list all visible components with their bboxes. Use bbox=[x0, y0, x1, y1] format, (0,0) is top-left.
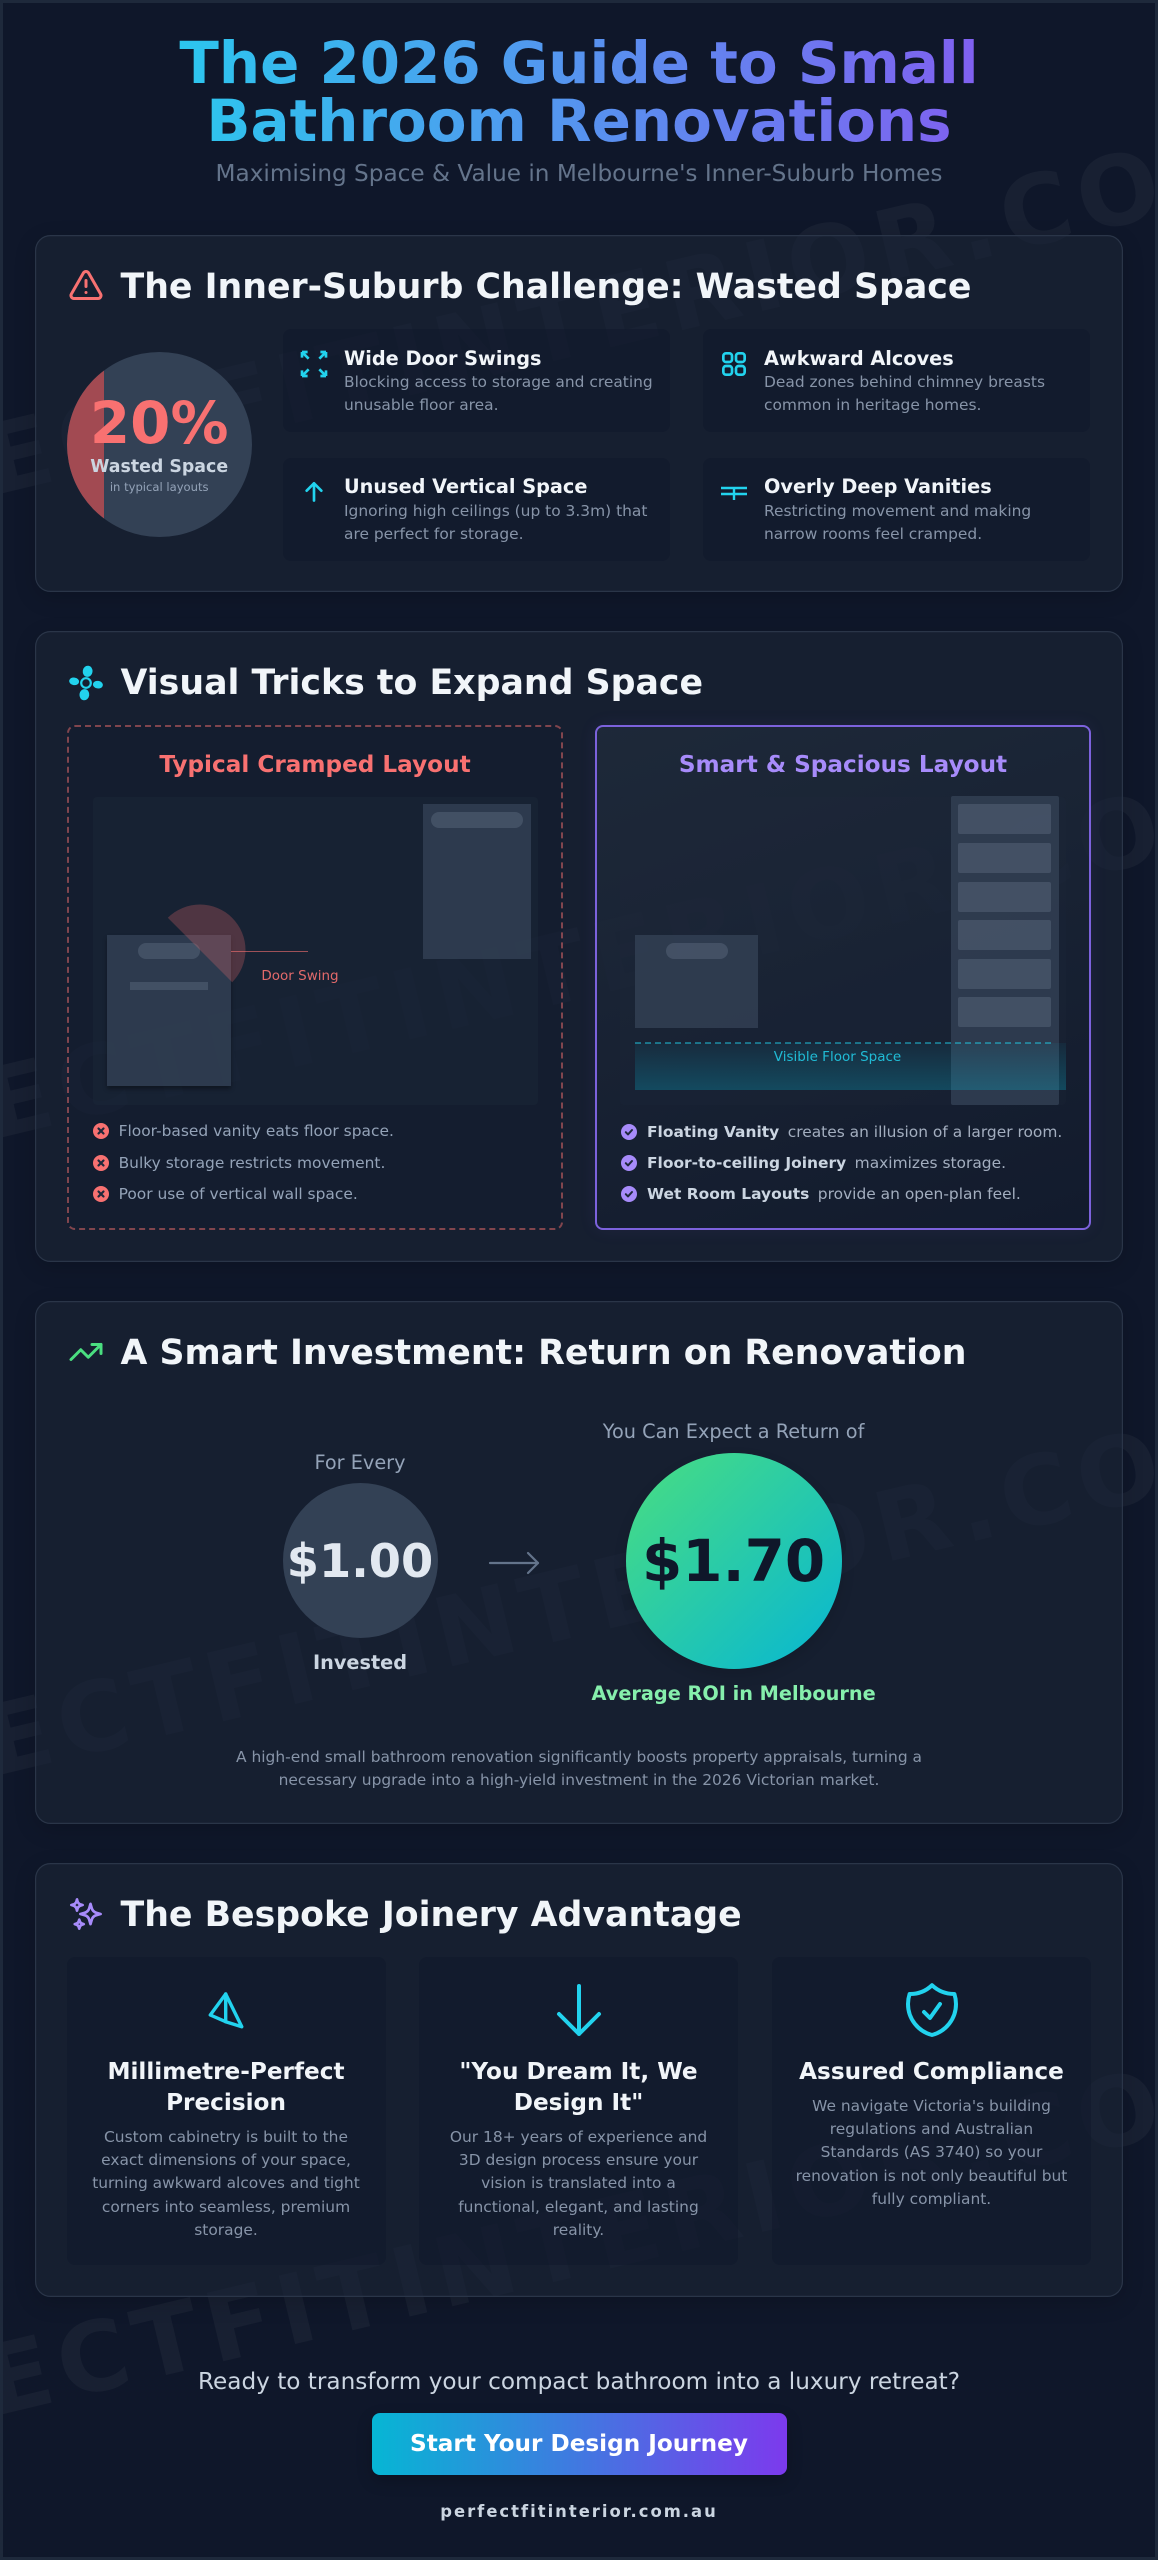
basin bbox=[666, 943, 728, 958]
drawer bar bbox=[130, 982, 208, 990]
item: wide door swings: Blocking access to storage and creating bbox=[344, 373, 653, 391]
feature: you dream it, we design it: Design It" bbox=[514, 2090, 643, 2116]
stat circle: 20% wasted space: 20% bbox=[90, 389, 228, 457]
item: awkward alcoves bbox=[703, 329, 1090, 432]
door swing line bbox=[231, 951, 308, 952]
label: for every: For Every bbox=[314, 1451, 406, 1474]
icon: down arrow bbox=[556, 1984, 602, 2036]
feature: assured compliance: renovation is not only beautiful but bbox=[796, 2167, 1067, 2185]
description: necessary upgrade into a high-yield investment in the 2026 Victorian market. bbox=[279, 1771, 879, 1789]
item: unused vertical space bbox=[283, 458, 670, 560]
panel: visual tricks bbox=[35, 631, 1123, 1262]
arrow bbox=[489, 1552, 540, 1574]
panel heading: Smart & Spacious Layout bbox=[679, 752, 1007, 778]
problem 3: Poor use of vertical wall space. bbox=[119, 1185, 358, 1203]
title: The 2026 Guide to Small bbox=[179, 29, 979, 97]
item: awkward alcoves: Dead zones behind chimney breasts bbox=[764, 373, 1045, 391]
item: wide door swings: Wide Door Swings bbox=[344, 346, 542, 370]
benefit 3: Wet Room Layouts provide an open-plan feel. bbox=[647, 1185, 1021, 1203]
feature: assured compliance: fully compliant. bbox=[872, 2190, 991, 2208]
cta question: Ready to transform your compact bathroom into a luxury retreat? bbox=[198, 2369, 960, 2395]
label: expect a return: You Can Expect a Return of bbox=[603, 1420, 864, 1443]
footer call to action bbox=[198, 2369, 960, 2521]
icon: precision bbox=[208, 1992, 244, 2028]
circle: $1.00 invested: $1.00 bbox=[287, 1534, 433, 1588]
problem 2: Bulky storage restricts movement. bbox=[119, 1154, 385, 1172]
title bbox=[179, 34, 979, 150]
feature: millimetre-perfect precision: storage. bbox=[194, 2221, 258, 2239]
item: overly deep vanities: Overly Deep Vanities bbox=[764, 475, 992, 498]
icon: deep vanity lines bbox=[721, 486, 747, 500]
panel: typical cramped layout bbox=[67, 725, 563, 1230]
door swing arc bbox=[168, 904, 246, 982]
item: overly deep vanities: narrow rooms feel cramped. bbox=[764, 525, 982, 543]
heading: The Inner-Suburb Challenge: Wasted Space bbox=[120, 267, 971, 307]
feature: millimetre-perfect precision: Precision bbox=[166, 2090, 286, 2116]
item: awkward alcoves: common in heritage homes. bbox=[764, 396, 981, 414]
icon: sparkles bbox=[70, 1898, 102, 1930]
feature: you dream it, we design it: 3D design process ensure your bbox=[459, 2151, 698, 2169]
feature: you dream it, we design it: Our 18+ years of experience and bbox=[450, 2128, 707, 2146]
icon: fan bbox=[69, 666, 103, 700]
heading: A Smart Investment: Return on Renovation bbox=[120, 1333, 966, 1373]
heading: Visual Tricks to Expand Space bbox=[120, 663, 703, 703]
feature: assured compliance: Standards (AS 3740) so your bbox=[821, 2143, 1042, 2161]
item: unused vertical space: Ignoring high ceilings (up to 3.3m) that bbox=[344, 502, 647, 520]
cta button bbox=[372, 2413, 786, 2475]
feature: millimetre-perfect precision bbox=[66, 1957, 386, 2265]
item: unused vertical space: Unused Vertical Space bbox=[344, 475, 587, 498]
circle: $1.70 return bbox=[626, 1452, 842, 1668]
problem list bbox=[93, 1122, 394, 1203]
page header bbox=[179, 29, 979, 187]
item: overly deep vanities: Restricting movement and making bbox=[764, 502, 1031, 520]
stat circle: 20% wasted space: Wasted Space bbox=[90, 457, 228, 477]
feature: assured compliance: We navigate Victoria's building bbox=[812, 2097, 1051, 2115]
panel: smart investment bbox=[35, 1301, 1123, 1824]
vanity bbox=[107, 935, 231, 1086]
panel: the inner-suburb challenge bbox=[35, 235, 1123, 592]
item: wide door swings: unusable floor area. bbox=[344, 396, 499, 414]
feature: you dream it, we design it bbox=[419, 1957, 738, 2265]
benefit 2: Floor-to-ceiling Joinery maximizes storage. bbox=[647, 1154, 1006, 1172]
floating vanity bbox=[635, 935, 758, 1028]
icon: expand bbox=[300, 350, 328, 378]
icon: warning triangle bbox=[69, 270, 102, 300]
panel: bespoke joinery advantage bbox=[35, 1863, 1123, 2297]
feature: millimetre-perfect precision: Custom cabinetry is built to the bbox=[104, 2128, 348, 2146]
feature: assured compliance: regulations and Australian bbox=[830, 2120, 1033, 2138]
door swing label: Door Swing bbox=[261, 968, 339, 984]
icon: shield check bbox=[906, 1983, 958, 2037]
floor label: Visible Floor Space bbox=[774, 1049, 901, 1065]
subtitle: Maximising Space & Value in Melbourne's Inner-Suburb Homes bbox=[216, 161, 942, 187]
item: wide door swings bbox=[283, 329, 670, 432]
basin bbox=[138, 943, 200, 959]
diagram: cramped room bbox=[92, 796, 538, 1105]
benefits list bbox=[621, 1123, 1062, 1203]
dashed floor line bbox=[635, 1042, 1051, 1044]
item: awkward alcoves: Awkward Alcoves bbox=[764, 346, 954, 370]
circle: $1.70 return: $1.70 bbox=[642, 1526, 825, 1594]
panel heading: Typical Cramped Layout bbox=[159, 752, 471, 778]
cta button: Start Your Design Journey bbox=[410, 2431, 748, 2457]
feature: millimetre-perfect precision: corners into seamless, premium bbox=[102, 2198, 350, 2216]
item: unused vertical space: are perfect for storage. bbox=[344, 525, 524, 543]
feature: millimetre-perfect precision: Millimetre-Perfect bbox=[107, 2059, 345, 2085]
visible floor bbox=[635, 1042, 1066, 1090]
title: Bathroom Renovations bbox=[206, 87, 952, 155]
circle: $1.00 invested bbox=[282, 1483, 438, 1638]
item: overly deep vanities bbox=[703, 458, 1090, 560]
problem 1: Floor-based vanity eats floor space. bbox=[119, 1122, 394, 1140]
feature: millimetre-perfect precision: turning awkward alcoves and tight bbox=[92, 2174, 360, 2192]
website: perfectfitinterior.com.au bbox=[440, 2502, 718, 2521]
stat circle: 20% wasted space bbox=[67, 352, 252, 537]
benefit 1: Floating Vanity creates an illusion of a larger room. bbox=[647, 1123, 1062, 1141]
cabinet handle bbox=[431, 812, 523, 828]
diagram: spacious room bbox=[620, 797, 1066, 1105]
icon: up arrow bbox=[305, 482, 323, 502]
floor-to-ceiling joinery bbox=[951, 796, 1059, 1105]
panel: smart and spacious layout bbox=[595, 725, 1091, 1230]
feature: you dream it, we design it: reality. bbox=[553, 2221, 604, 2239]
icon: trending up bbox=[69, 1342, 103, 1362]
heading: The Bespoke Joinery Advantage bbox=[120, 1895, 742, 1935]
label: average roi: Average ROI in Melbourne bbox=[592, 1682, 876, 1705]
feature: assured compliance bbox=[772, 1957, 1091, 2265]
label: invested: Invested bbox=[313, 1651, 407, 1674]
stat circle: 20% wasted space: in typical layouts bbox=[110, 480, 209, 494]
description: A high-end small bathroom renovation significantly boosts property appraisals, turning a bbox=[236, 1748, 922, 1766]
storage cabinet bbox=[423, 804, 531, 958]
feature: assured compliance: Assured Compliance bbox=[799, 2059, 1064, 2085]
feature: you dream it, we design it: "You Dream It, We bbox=[459, 2059, 698, 2085]
icon: grid bbox=[722, 352, 746, 376]
feature: you dream it, we design it: vision is translated into a bbox=[481, 2174, 676, 2192]
description bbox=[236, 1748, 922, 1789]
feature: millimetre-perfect precision: exact dimensions of your space, bbox=[101, 2151, 351, 2169]
feature: you dream it, we design it: functional, elegant, and lasting bbox=[458, 2198, 699, 2216]
